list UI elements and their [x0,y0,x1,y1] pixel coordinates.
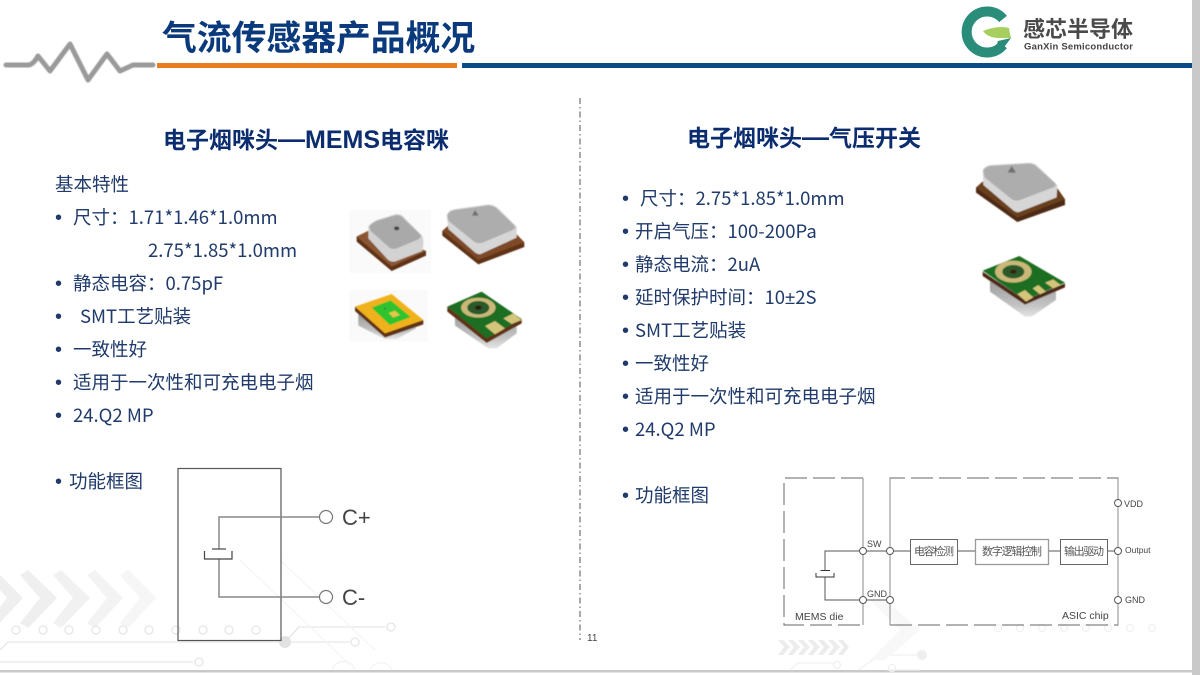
block diagram: MEMS die and ASIC chip [784,478,1151,625]
block: output driver: 输出驱动 [1064,543,1104,559]
feature list: right: • [622,254,629,276]
feature list: left: 一致性好 [73,336,147,362]
feature list: right: • [622,221,629,243]
pin labels: ASIC chip [1062,610,1109,622]
heading: right: 电子烟咪头—气压开关 [687,119,921,153]
bullet: block diagram right: • [622,485,629,507]
pin labels: GND [867,589,888,599]
feature list: right: • [622,188,629,210]
feature list: right: • [622,320,629,342]
chip: PCB bottom [983,256,1065,317]
chip: small can [357,214,426,271]
feature list: right: 适用于一次性和可充电电子烟 [635,383,876,409]
feature list: left: 适用于一次性和可充电电子烟 [73,369,314,395]
chip: yellow underside [355,294,423,339]
logo subtitle: GanXin Semiconductor [1024,42,1133,52]
logo [967,12,1133,52]
feature list: right [622,185,876,442]
header rule: blue [462,63,1192,68]
feature list: right: 静态电流：2uA [635,251,761,277]
background circuit decoration [0,560,1156,672]
feature list: right: • [622,419,629,441]
terminal C+ [320,505,371,530]
feature list: right: 开启气压：100-200Pa [635,218,817,244]
label: block diagram right: 功能框图 [635,482,709,508]
block: output driver [1060,540,1108,564]
label: block diagram left: 功能框图 [69,468,143,494]
feature list: left: 基本特性 [55,171,129,197]
bullet: block diagram left: • [55,471,62,493]
block: digital logic control: 数字逻辑控制 [982,543,1042,559]
feature list: left: • [55,372,62,394]
feature list: left: 24.Q2 MP [73,402,154,428]
page number: 11 [587,633,598,644]
pin labels: SW [867,539,882,549]
feature list: left [55,171,314,428]
MEMS die outline [784,478,863,625]
logo wordmark: 感芯半导体 [1023,12,1133,44]
icon: G mark [967,12,1011,52]
feature list: left: • [55,207,62,229]
center divider [579,98,581,640]
terminal C+: C+ [342,505,371,530]
signal wiring [825,551,1118,600]
feature list: right: SMT工艺贴装 [635,317,746,343]
pin labels: MEMS die [795,611,844,623]
terminals [860,500,1122,604]
block: digital logic control [976,540,1048,564]
feature list: left: 尺寸：1.71*1.46*1.0mm [73,204,278,230]
feature list: right: 延时保护时间：10±2S [635,284,816,310]
pin labels: Output [1125,545,1151,555]
feature list: left: 静态电容：0.75pF [73,270,223,296]
waveform icon [6,44,153,80]
pin labels: GND [1125,595,1146,605]
chip: large can [442,204,524,264]
terminal C-: C- [342,585,365,610]
pin labels [795,499,1151,623]
heading: left: 电子烟咪头—MEMS电容咪 [163,121,449,155]
chip images: right [976,163,1065,317]
block diagram: capacitor [178,468,371,640]
feature list: left: • [55,306,62,328]
feature list: left: • [55,405,62,427]
feature list: left: 2.75*1.85*1.0mm [148,237,297,263]
chip: can top [976,163,1065,222]
header rule: orange [157,63,457,68]
feature list: right: • [622,353,629,375]
feature list: right: 尺寸：2.75*1.85*1.0mm [640,185,845,211]
feature list: left: SMT工艺贴装 [80,303,191,329]
chip: green PCB [447,292,522,348]
feature list: left: • [55,339,62,361]
feature list: right: 一致性好 [635,350,709,376]
feature list: left: • [55,273,62,295]
terminal C- [320,585,365,610]
feature list: right: • [622,287,629,309]
panel: MEMS capacitive mic [55,121,524,640]
block: capacitance detection: 电容检测 [914,543,954,559]
ASIC chip outline [890,478,1118,625]
chip images: left [349,204,524,348]
title: 气流传感器产品概况 [162,11,475,61]
block: capacitance detection [910,540,958,564]
feature list: right: 24.Q2 MP [635,416,716,442]
panel: air pressure switch [622,119,1151,625]
pin labels: VDD [1124,499,1144,509]
feature list: right: • [622,386,629,408]
